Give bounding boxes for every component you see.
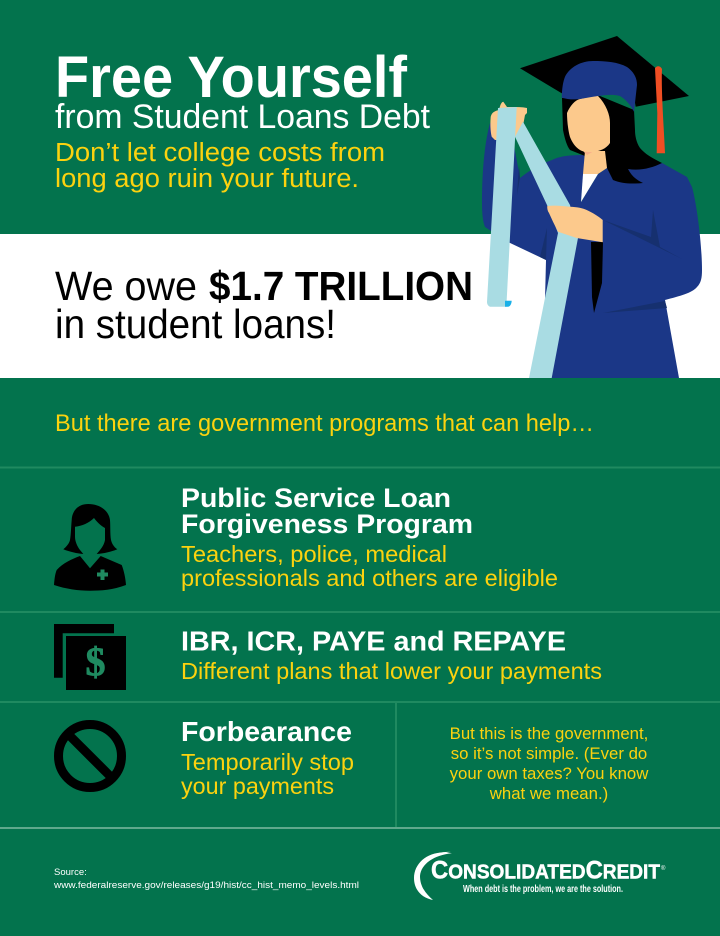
heading <box>181 483 473 539</box>
headline: debt amount <box>55 263 473 347</box>
lower hand <box>547 206 603 242</box>
logo: Consolidated Credit: ® <box>661 865 666 872</box>
ribbon end fold <box>505 301 512 307</box>
heading: Forbearance <box>181 716 352 747</box>
callout: your own taxes? You know <box>450 764 649 783</box>
gown shading <box>517 165 682 313</box>
icon: medical professional <box>54 504 126 591</box>
intro line: But there are government programs that can help… <box>55 410 594 437</box>
heading: Public Service Loan <box>181 483 451 513</box>
description: your payments <box>181 773 334 799</box>
gown opening <box>591 242 603 313</box>
title <box>55 45 431 136</box>
tassel <box>655 66 665 153</box>
logo: Consolidated Credit: CONSOLIDATEDCREDIT <box>431 856 660 884</box>
callout: But this is the government, <box>450 724 648 743</box>
callout: so it’s not simple. (Ever do <box>451 744 647 763</box>
subtitle: Don’t let college costs from <box>55 139 385 167</box>
shirt <box>581 174 598 202</box>
source: Source: <box>54 867 87 878</box>
panel: white debt band <box>0 234 720 378</box>
description: Teachers, police, medical <box>181 541 447 567</box>
icon: money stack <box>54 624 126 690</box>
title: Free Yourself <box>55 45 408 110</box>
headline: debt amount: We owe <box>55 263 197 309</box>
description <box>181 749 354 799</box>
cap <box>562 61 637 112</box>
icon: prohibited sign <box>58 724 122 788</box>
logo: Consolidated Credit <box>414 852 666 900</box>
face <box>567 96 610 152</box>
neck shadow <box>582 150 594 155</box>
description: Different plans that lower your payments <box>181 658 602 684</box>
description <box>181 541 558 591</box>
ribbon: bill <box>487 107 517 307</box>
source: www.federalreserve.gov/releases/g19/hist/cc_hist_memo_levels.html <box>53 880 359 891</box>
panel: forbearance <box>58 716 354 799</box>
hair <box>562 96 662 184</box>
heading: Forgiveness Program <box>181 509 473 539</box>
heading: IBR, ICR, PAYE and REPAYE <box>181 626 566 656</box>
cap board <box>520 36 689 107</box>
subtitle: long ago ruin your future. <box>55 165 359 193</box>
logo: Consolidated Credit: When debt is the problem, we are the solution. <box>463 883 623 895</box>
gown <box>482 123 702 378</box>
source <box>53 867 359 891</box>
description: professionals and others are eligible <box>181 565 558 591</box>
hand on bill top <box>490 102 527 140</box>
headline: debt amount: in student loans! <box>55 301 336 347</box>
panel: repayment plans <box>54 624 602 690</box>
callout: what we mean.) <box>489 784 608 803</box>
neck <box>583 151 607 174</box>
panel: public service loan forgiveness <box>54 483 558 591</box>
callout <box>450 724 649 803</box>
description: Temporarily stop <box>181 749 354 775</box>
icon: graduate holding long bill <box>482 36 702 378</box>
title: from Student Loans Debt <box>55 98 431 136</box>
icon: money stack: $ <box>86 639 106 684</box>
headline: debt amount: $1.7 TRILLION <box>209 263 473 309</box>
subtitle <box>55 139 385 193</box>
